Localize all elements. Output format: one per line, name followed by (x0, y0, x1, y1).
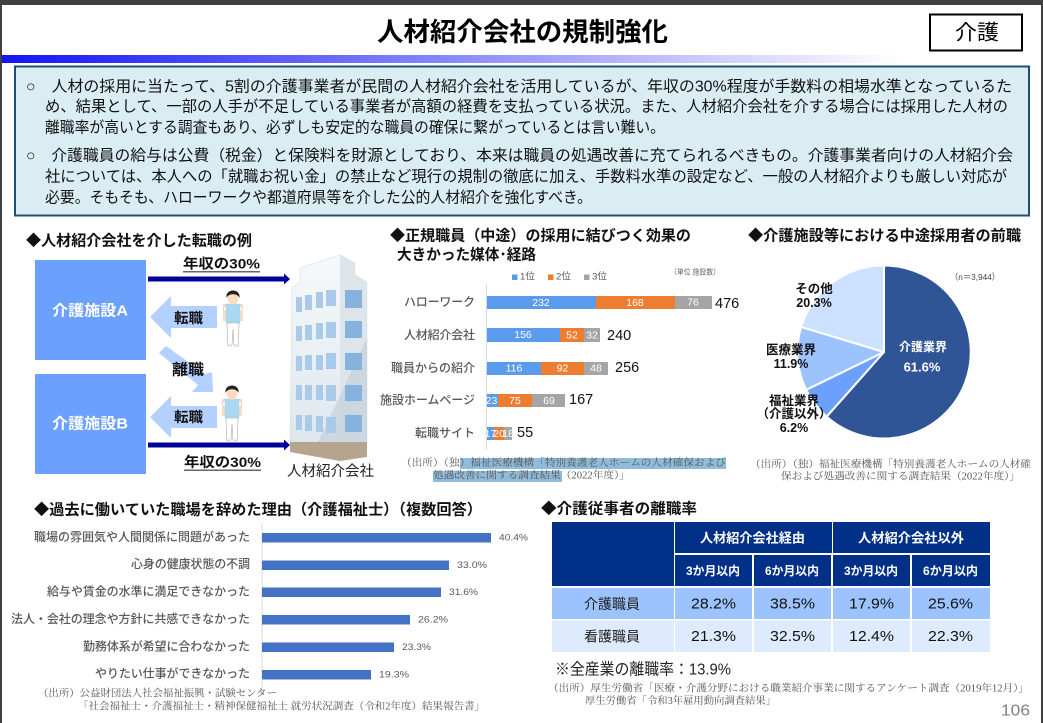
table row: nursing staff: 12.4% (849, 628, 894, 645)
heading: ◆正規職員（中途）の採用に結びつく効果の (390, 226, 691, 244)
title: 人材紹介会社の規制強化 (377, 17, 668, 47)
bars: ハローワーク: 476 (715, 296, 739, 312)
pie label: care: 61.6% (904, 360, 941, 374)
category labels: 転職サイト (415, 425, 475, 440)
pie label: welfare: 福祉業界 (769, 393, 819, 408)
bars: 人材紹介会社: 240 (607, 328, 631, 344)
row: work system: 23.3% (402, 642, 432, 653)
bars: 人材紹介会社 (487, 328, 631, 344)
legend: 3位 (592, 270, 607, 282)
row: desired work: やりたい仕事ができなかった (95, 666, 250, 680)
arrow: leaving job: 離職 (172, 360, 204, 378)
legend: 1位 (520, 270, 535, 282)
category labels: ハローワーク (404, 295, 475, 309)
facility B: 介護施設B (52, 414, 128, 432)
row: pay: 31.6% (449, 587, 479, 598)
table row: nursing staff: 21.3% (691, 628, 736, 645)
bars: 人材紹介会社: 32 (586, 330, 598, 342)
row: health: 33.0% (457, 560, 488, 571)
category labels (380, 295, 475, 440)
row: atmosphere (34, 529, 529, 544)
row: pay: 給与や賃金の水準に満足できなかった (47, 584, 250, 598)
note: all-industry turnover: ※全産業の離職率：13.9% (555, 660, 731, 678)
table row: nursing staff (552, 620, 990, 652)
bars: 施設ホームページ: 75 (509, 395, 521, 407)
icon: agency building (290, 255, 367, 461)
table row: care staff: 25.6% (928, 596, 973, 612)
table row: care staff (552, 588, 990, 619)
bars: 職員からの紹介: 48 (590, 362, 602, 374)
source note: 厚生労働省「令和3年雇用動向調査結果」 (585, 694, 776, 707)
bars: 人材紹介会社: 52 (566, 330, 578, 342)
row: philosophy: 26.2% (418, 614, 449, 626)
row: health (131, 556, 488, 571)
heading: ◆介護従事者の離職率 (541, 500, 697, 518)
table row: care staff: 介護職員 (584, 596, 640, 612)
table row: nursing staff: 22.3% (928, 628, 973, 645)
row: pay (47, 584, 479, 598)
panel: summary text: 必要。そもそも、ハローワークや都道府県等を介した公的人材紹介を強化すべき。 (45, 188, 592, 206)
pie label: welfare: （介護以外） (756, 406, 832, 421)
panel: summary text (15, 66, 1029, 216)
bars: 職員からの紹介: 256 (615, 360, 639, 376)
panel: summary text: め、結果として、一部の人手が不足している事業者が高額の経費を支払っている状況。また、人材紹介会社を介する場合には採用した人材の (45, 98, 1008, 116)
table row: care staff: 17.9% (849, 596, 894, 612)
heading: ◆人材紹介会社を介した転職の例 (26, 232, 252, 250)
bars: 転職サイト (485, 425, 533, 441)
pie label: other: 20.3% (796, 296, 832, 310)
category tag: 介護: 介護 (955, 22, 999, 44)
bars: 職員からの紹介: 92 (557, 362, 568, 374)
panel: turnover table (541, 500, 1029, 707)
title gradient bar (2, 55, 902, 63)
page number: 106 (1001, 702, 1030, 720)
pie label: welfare (756, 393, 832, 435)
source note (548, 682, 1029, 707)
source note (38, 686, 485, 712)
panel: summary text: ○ 介護職員の給与は公費（税金）と保険料を財源としており、本来は職員の処遇改善に充てられるべきもの。介護事業者向けの人材紹介会 (26, 146, 1013, 164)
panel: reasons for leaving bar chart (11, 500, 529, 712)
arrow: job change to B (150, 396, 217, 438)
bars: 転職サイト: 18 (502, 428, 514, 440)
panel: job change example (26, 232, 374, 480)
category labels: 人材紹介会社 (404, 327, 475, 342)
heading (390, 226, 691, 264)
table header: 人材紹介会社以外 (858, 530, 964, 546)
row: work system (83, 638, 432, 654)
table header: 6か月以内 (923, 563, 978, 578)
heading: ◆介護施設等における中途採用者の前職 (748, 226, 1021, 244)
source note: （出所）（独）福祉医療機構「特別養護老人ホームの人材確 (750, 458, 1031, 470)
legend: 2位 (556, 270, 571, 282)
source note: （出所）（独）福祉医療機構「特別養護老人ホームの人材確保および (401, 456, 726, 469)
source note: 保および処遇改善に関する調査結果（2022年度）」 (781, 470, 1020, 482)
pie label: medical: 医療業界 (766, 342, 816, 357)
bars: ハローワーク: 168 (626, 297, 644, 309)
row: atmosphere: 40.4% (499, 532, 529, 544)
row: health: 心身の健康状態の不調 (131, 556, 250, 571)
table header: 3か月以内 (686, 563, 740, 578)
arrow: job change to B: 転職 (174, 409, 203, 425)
facility A: 介護施設A (52, 302, 128, 320)
row: philosophy (11, 611, 449, 626)
panel: summary text: 社については、本人への「就職お祝い金」の禁止など現行の規制の徹底に加え、手数料水準の設定など、一般の人材紹介よりも厳しい対応が (45, 168, 1007, 186)
source note (750, 458, 1031, 482)
icon: care worker bottom (222, 386, 242, 442)
bars: 職員からの紹介 (487, 360, 639, 376)
heading: ◆過去に働いていた職場を辞めた理由（介護福祉士）（複数回答） (34, 500, 482, 518)
pie label: medical: 11.9% (774, 357, 808, 371)
panel: recruitment channel bar chart (380, 226, 739, 482)
table row: care staff: 38.5% (770, 596, 815, 612)
unit note: （単位 施設数） (670, 266, 720, 276)
bars: 施設ホームページ (486, 392, 593, 408)
arrow: job change to A: 転職 (174, 310, 203, 326)
panel: summary text: 離職率が高いとする調査もあり、必ずしも安定的な職員の確保に繋がっているとは言い難い。 (45, 118, 665, 136)
category tag: 介護 (930, 14, 1022, 50)
bars: 施設ホームページ: 23 (486, 395, 497, 407)
source note (401, 456, 726, 482)
bars: 転職サイト: 17 (485, 428, 496, 440)
arrow: fee from facility B (148, 440, 290, 471)
pie chart (797, 265, 971, 438)
category labels: 施設ホームページ (380, 392, 475, 407)
table header: 6か月以内 (765, 563, 819, 578)
bars: 人材紹介会社: 156 (514, 329, 532, 341)
bars: ハローワーク: 76 (687, 296, 699, 308)
panel: previous job pie chart (748, 226, 1031, 482)
source note: （出所）厚生労働省「医療・介護分野における職業紹介事業に関するアンケート調査（2019年12月）」 (548, 682, 1029, 694)
bars: 転職サイト: 55 (517, 425, 533, 441)
bars: ハローワーク (487, 296, 739, 312)
icon: care worker top (223, 290, 243, 346)
legend (512, 270, 607, 282)
facility B (35, 374, 146, 474)
arrow: job change to A (150, 296, 217, 338)
table header (552, 522, 990, 586)
table row: nursing staff: 32.5% (770, 628, 815, 645)
row: philosophy: 法人・会社の理念や方針に共感できなかった (11, 611, 250, 626)
pie label: care: 介護業界 (899, 339, 947, 354)
table row: nursing staff: 看護職員 (584, 628, 640, 644)
row: desired work (95, 666, 410, 680)
arrow: leaving job (159, 346, 213, 392)
label: agency: 人材紹介会社 (287, 463, 374, 480)
facility A (35, 260, 146, 360)
source note: 処遇改善に関する調査結果（2022年度）」 (433, 468, 630, 482)
table row: care staff: 28.2% (691, 596, 736, 612)
source note: （出所）公益財団法人社会福祉振興・試験センター (38, 686, 277, 700)
bars: ハローワーク: 232 (532, 297, 550, 309)
pie label: medical (766, 342, 816, 371)
arrow: fee from facility A (148, 256, 290, 284)
heading: 大きかった媒体･経路 (397, 246, 536, 264)
table header: 3か月以内 (844, 563, 898, 578)
bars: 施設ホームページ: 167 (569, 392, 593, 408)
row: work system: 勤務体系が希望に合わなかった (83, 638, 250, 654)
pie label: care (899, 339, 947, 374)
pie label: welfare: 6.2% (780, 421, 808, 435)
n note: （n＝3,944） (950, 272, 1000, 282)
pie label: other (795, 281, 833, 310)
pie label: other: その他 (795, 281, 833, 296)
arrow: fee from facility B: 年収の30% (184, 454, 262, 470)
arrow: fee from facility A: 年収の30% (183, 256, 261, 272)
panel: summary text: ○ 人材の採用に当たって、5割の介護事業者が民間の人材紹介会社を活用しているが、年収の30%程度が手数料の相場水準となっているた (26, 78, 1012, 96)
row: desired work: 19.3% (379, 670, 410, 680)
bars: 施設ホームページ: 69 (543, 395, 555, 407)
source note: 「社会福祉士・介護福祉士・精神保健福祉士 就労状況調査（令和2年度）結果報告書」 (78, 700, 485, 712)
bars: 職員からの紹介: 116 (506, 362, 523, 374)
bars: 転職サイト: 20 (493, 428, 505, 440)
table header: 人材紹介会社経由 (700, 530, 805, 546)
row: atmosphere: 職場の雰囲気や人間関係に問題があった (34, 529, 250, 544)
category labels: 職員からの紹介 (391, 360, 475, 375)
